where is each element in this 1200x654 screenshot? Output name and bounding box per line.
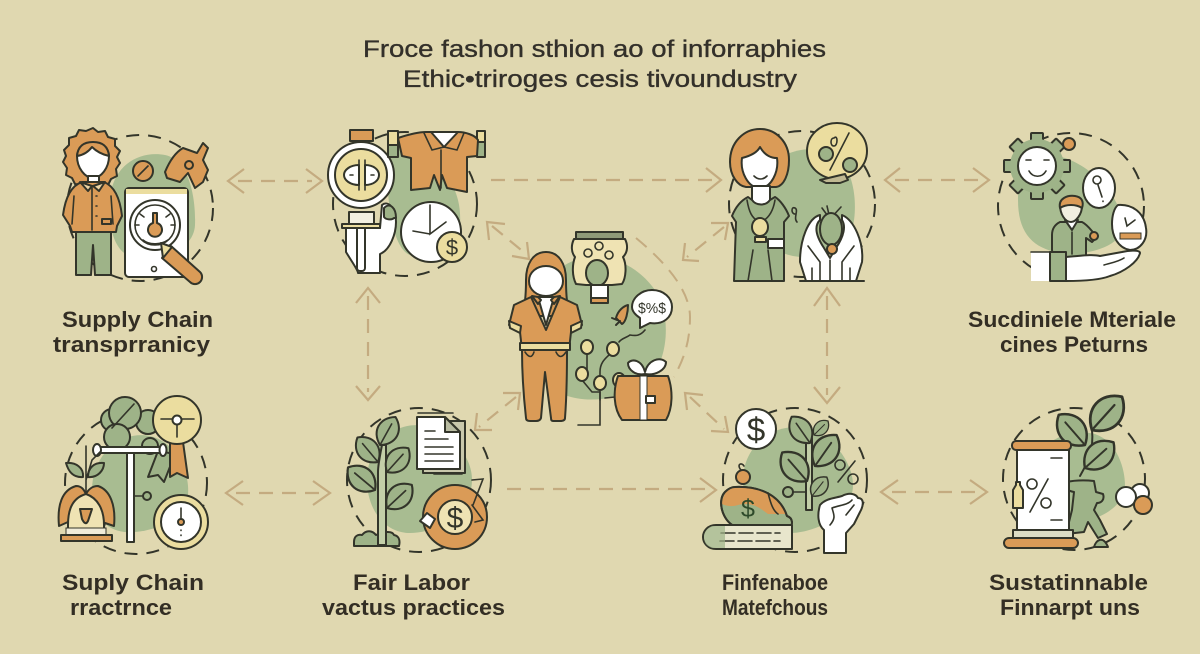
dollar cycle: $ xyxy=(447,502,464,535)
label: sustainable materials xyxy=(968,307,1176,357)
label: fair labor practices: Fair Labor xyxy=(353,570,470,595)
plant xyxy=(773,411,847,510)
arrow: top left link xyxy=(228,169,322,193)
hands with seed xyxy=(792,206,864,281)
icon: gear, manager and hand xyxy=(998,133,1146,281)
label: supply chain transparency xyxy=(53,307,213,357)
scroll xyxy=(1004,441,1078,548)
dollar circle: $ xyxy=(747,411,765,448)
icon: certificate, stand and plant xyxy=(59,396,208,554)
bottle xyxy=(1013,482,1023,508)
gear xyxy=(1004,133,1070,199)
open hand xyxy=(1031,251,1140,281)
arrow: centre to top third xyxy=(683,223,728,261)
label: fair labor practices: vactus practices xyxy=(322,595,505,620)
arrow: bottom right link xyxy=(881,480,987,504)
icon: money bag, plant and fist xyxy=(703,408,867,553)
label: sustainable finance: Finnarpt uns xyxy=(1000,595,1140,620)
dollar coin: $ xyxy=(446,235,458,260)
foliage xyxy=(101,397,160,454)
speech bubble xyxy=(632,290,672,328)
alert dial xyxy=(154,495,208,549)
manager xyxy=(1052,196,1098,280)
magnifier xyxy=(328,130,394,208)
plant xyxy=(341,412,419,546)
chain of nodes xyxy=(576,330,645,425)
leaves xyxy=(1049,387,1133,477)
plant in bell xyxy=(59,446,114,541)
splash shape xyxy=(165,143,208,188)
label: sustainable finance: Sustatinnable xyxy=(989,570,1148,595)
shirt xyxy=(388,131,485,192)
arrow: bottom left link xyxy=(226,481,330,505)
badge with ribbon xyxy=(148,396,201,482)
label: financial matters xyxy=(722,570,828,620)
arrow: right vertical link xyxy=(814,288,840,403)
label: financial matters: Finfenaboe xyxy=(722,570,828,595)
dollar cycle xyxy=(420,479,487,549)
label: supply chain practice: Suply Chain xyxy=(62,570,204,595)
three dots xyxy=(1116,484,1152,514)
label: sustainable finance xyxy=(989,570,1148,620)
label: sustainable materials: cines Peturns xyxy=(1000,332,1148,357)
arrow: top centre link xyxy=(491,168,721,192)
money bag on book: $ xyxy=(741,495,755,523)
arrow: centre to top second xyxy=(487,222,529,259)
money bag on book xyxy=(703,464,792,549)
figure xyxy=(1063,480,1108,547)
pencil xyxy=(161,243,202,284)
person xyxy=(509,252,582,421)
label: sustainable materials: Sucdiniele Mteriale xyxy=(968,307,1176,332)
icon: plant, document and coin xyxy=(341,408,491,552)
label: financial matters: Matefchous xyxy=(722,595,828,620)
tablet with gauge xyxy=(125,188,188,277)
title: Ethic•triroges cesis tivoundustry xyxy=(403,66,797,93)
woman xyxy=(730,129,789,281)
dollar circle xyxy=(736,409,776,449)
icon: woman with seedling xyxy=(729,123,875,281)
arrow: centre to bottom second xyxy=(475,393,520,430)
label: supply chain practice xyxy=(62,570,204,620)
bug xyxy=(612,305,628,325)
small orange dot xyxy=(1063,138,1075,150)
clock xyxy=(401,202,461,262)
orange disc xyxy=(133,161,153,181)
document xyxy=(417,413,465,474)
percent xyxy=(835,460,858,484)
question bubble xyxy=(1083,168,1115,208)
speech bubble: $%$ xyxy=(638,300,667,317)
title: Froce fashon sthion ao of inforraphies xyxy=(363,36,826,63)
fist xyxy=(818,494,863,553)
icon: central person xyxy=(509,232,690,425)
person with gear hair xyxy=(63,128,122,275)
hand and stick xyxy=(342,204,396,273)
arrow: top right link xyxy=(885,168,989,192)
label: fair labor practices xyxy=(322,570,505,620)
icon: magnifier, shirt and clock xyxy=(328,130,485,276)
percent circle xyxy=(807,123,867,183)
arrow: centre to bottom third xyxy=(685,393,728,432)
icon: scroll, leaves and figure xyxy=(1003,387,1152,550)
petal clock xyxy=(1112,205,1146,250)
gift box xyxy=(615,359,672,420)
label: supply chain transparency: transprranicy xyxy=(53,332,211,357)
arrow: left vertical link xyxy=(356,288,380,400)
icon: supply chain transparency xyxy=(63,128,213,284)
title xyxy=(363,36,826,93)
dollar coin xyxy=(437,232,467,262)
jar with bulb xyxy=(572,232,627,303)
label: supply chain practice: rractrnce xyxy=(70,595,172,620)
arrow: bottom centre link xyxy=(507,478,716,502)
label: supply chain transparency: Supply Chain xyxy=(62,307,213,332)
T stand xyxy=(93,444,166,542)
